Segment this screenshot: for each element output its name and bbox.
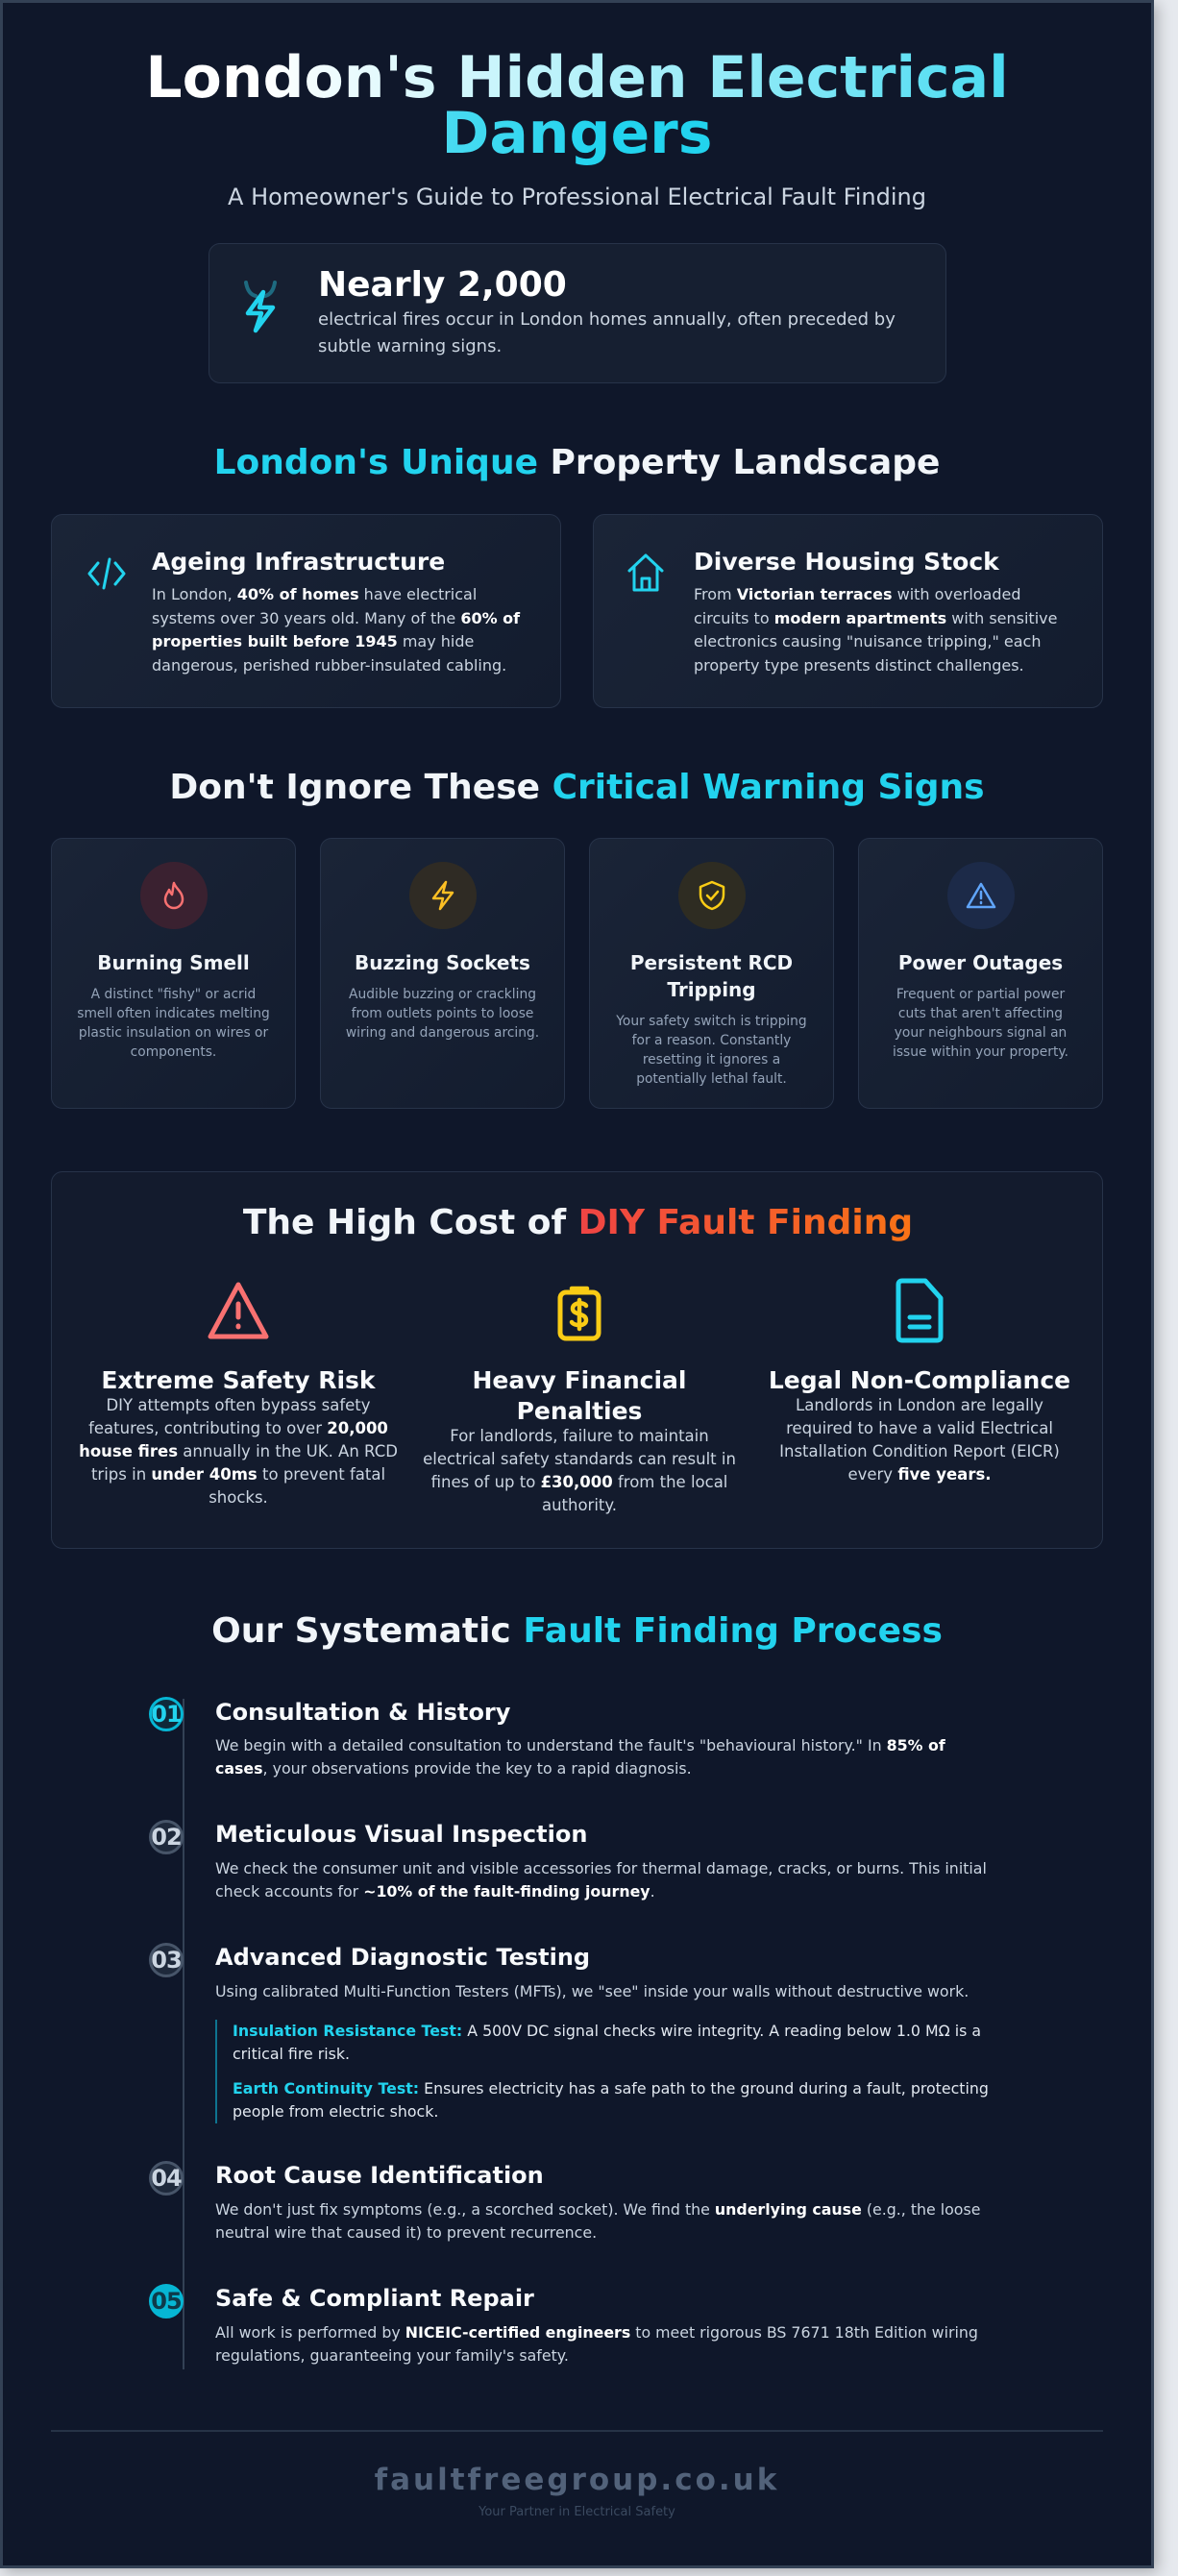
card: rcd tripping: Persistent RCD Tripping bbox=[630, 951, 793, 1001]
step 3: Advanced Diagnostic Testing bbox=[215, 1944, 590, 1971]
card: burning smell bbox=[51, 838, 296, 1109]
icon: alert bbox=[947, 862, 1015, 929]
card title: Diverse Housing Stock bbox=[694, 548, 999, 576]
step 1: We begin with a detailed consultation to understand the fault's "behavioural history." In 85% of cases, your observations provide the key to a rapid diagnosis. bbox=[215, 1736, 945, 1778]
step 1: Consultation & History bbox=[215, 1699, 510, 1726]
icon: flame bbox=[140, 862, 208, 929]
icon: house bbox=[627, 553, 664, 592]
icon: shield bbox=[678, 862, 746, 929]
column: safety risk bbox=[79, 1282, 398, 1507]
step 4: We don't just fix symptoms (e.g., a scorched socket). We find the underlying cause (e.g., the loose neutral wire that caused it) to prevent recurrence. bbox=[215, 2200, 980, 2242]
sub-tests bbox=[215, 2020, 1005, 2123]
panel title: The High Cost of DIY Fault Finding bbox=[243, 1203, 913, 1242]
column: safety risk: Extreme Safety Risk bbox=[101, 1366, 376, 1394]
step 3: Using calibrated Multi-Function Testers (MFTs), we "see" inside your walls without destructive work. bbox=[215, 1982, 969, 2000]
icon: code bbox=[88, 557, 125, 590]
stat text: electrical fires occur in London homes annually, often preceded by subtle warning signs. bbox=[318, 309, 896, 356]
step 5: All work is performed by NICEIC-certified engineers to meet rigorous BS 7671 18th Edition wiring regulations, guaranteeing your family's safety. bbox=[215, 2323, 978, 2365]
title bbox=[145, 44, 1009, 167]
stat number: Nearly 2,000 bbox=[318, 265, 567, 305]
panel: DIY cost bbox=[51, 1171, 1103, 1549]
icon: document bbox=[896, 1278, 944, 1343]
step 5 bbox=[149, 2284, 978, 2365]
column: financial: For landlords, failure to maintain electrical safety standards can result in fines of up to £30,000 from the local authority. bbox=[423, 1427, 736, 1514]
step 5: Safe & Compliant Repair bbox=[215, 2285, 534, 2312]
heading: process: Our Systematic Fault Finding Process bbox=[211, 1611, 943, 1651]
sub-tests: Earth Continuity Test: Ensures electricity has a safe path to the ground during a fault, protecting people from electric shock. bbox=[233, 2079, 989, 2121]
subtitle: A Homeowner's Guide to Professional Electrical Fault Finding bbox=[228, 184, 926, 210]
icon: warning bbox=[208, 1282, 269, 1339]
column: legal bbox=[769, 1278, 1070, 1484]
card: rcd tripping bbox=[589, 838, 834, 1109]
footer: domain: faultfreegroup.co.uk bbox=[375, 2463, 779, 2497]
icon: bolt bbox=[409, 862, 477, 929]
step 4: 04 bbox=[151, 2165, 182, 2192]
step 2: Meticulous Visual Inspection bbox=[215, 1821, 587, 1848]
title: Dangers bbox=[442, 100, 712, 167]
step 5: 05 bbox=[151, 2288, 182, 2315]
timeline line bbox=[183, 1699, 184, 2369]
icon: money bbox=[557, 1286, 601, 1341]
card: power outages bbox=[858, 838, 1103, 1109]
card: burning smell: A distinct "fishy" or acrid smell often indicates melting plastic insulation on wires or components. bbox=[77, 987, 270, 1060]
icon: lightning bbox=[244, 281, 277, 332]
step 2: 02 bbox=[151, 1824, 182, 1851]
heading: property landscape: London's Unique Property Landscape bbox=[214, 443, 940, 482]
card: buzzing sockets: Buzzing Sockets bbox=[355, 951, 530, 974]
step 3 bbox=[149, 1943, 989, 2123]
card: buzzing sockets: Audible buzzing or crackling from outlets points to loose wiring and dangerous arcing. bbox=[346, 987, 539, 1041]
card title: Ageing Infrastructure bbox=[152, 548, 445, 576]
card: power outages: Frequent or partial power cuts that aren't affecting your neighbours signal an issue within your property. bbox=[893, 987, 1068, 1060]
step 3: 03 bbox=[151, 1947, 182, 1974]
step 2 bbox=[149, 1820, 987, 1901]
column: financial bbox=[423, 1286, 736, 1514]
column: safety risk: DIY attempts often bypass safety features, contributing to over 20,000 house fires annually in the UK. An RCD trips in under 40ms to prevent fatal shocks. bbox=[79, 1396, 398, 1507]
panel: diverse housing bbox=[593, 514, 1103, 708]
step 1 bbox=[149, 1697, 945, 1778]
step 4: Root Cause Identification bbox=[215, 2162, 544, 2189]
card: power outages: Power Outages bbox=[898, 951, 1063, 974]
sub-tests: Insulation Resistance Test: A 500V DC signal checks wire integrity. A reading below 1.0 MΩ is a critical fire risk. bbox=[233, 2022, 981, 2063]
step 4 bbox=[149, 2161, 980, 2242]
step 1: 01 bbox=[151, 1701, 182, 1728]
heading: warning signs: Don't Ignore These Critical Warning Signs bbox=[169, 768, 985, 807]
title: London's Hidden Electrical bbox=[145, 44, 1009, 111]
column: legal: Legal Non-Compliance bbox=[769, 1366, 1070, 1394]
card: rcd tripping: Your safety switch is tripping for a reason. Constantly resetting it ignores a potentially lethal fault. bbox=[616, 1014, 807, 1087]
column: financial: Heavy Financial Penalties bbox=[473, 1366, 686, 1425]
column: legal: Landlords in London are legally required to have a valid Electrical Installation Condition Report (EICR) every five years. bbox=[779, 1396, 1060, 1484]
footer: tagline: Your Partner in Electrical Safety bbox=[479, 2505, 675, 2519]
stat callout bbox=[209, 243, 946, 383]
panel: ageing infrastructure bbox=[51, 514, 561, 708]
card: burning smell: Burning Smell bbox=[97, 951, 250, 974]
card: buzzing sockets bbox=[320, 838, 565, 1109]
card text: In London, 40% of homes have electrical systems over 30 years old. Many of the 60% of properties built before 1945 may hide dangerous, perished rubber-insulated cabling. bbox=[152, 585, 520, 675]
card text: From Victorian terraces with overloaded circuits to modern apartments with sensitive electronics causing "nuisance tripping," each property type presents distinct challenges. bbox=[694, 585, 1057, 675]
step 2: We check the consumer unit and visible accessories for thermal damage, cracks, or burns. This initial check accounts for ~10% of the fault-finding journey. bbox=[215, 1859, 987, 1901]
divider bbox=[51, 2430, 1103, 2432]
